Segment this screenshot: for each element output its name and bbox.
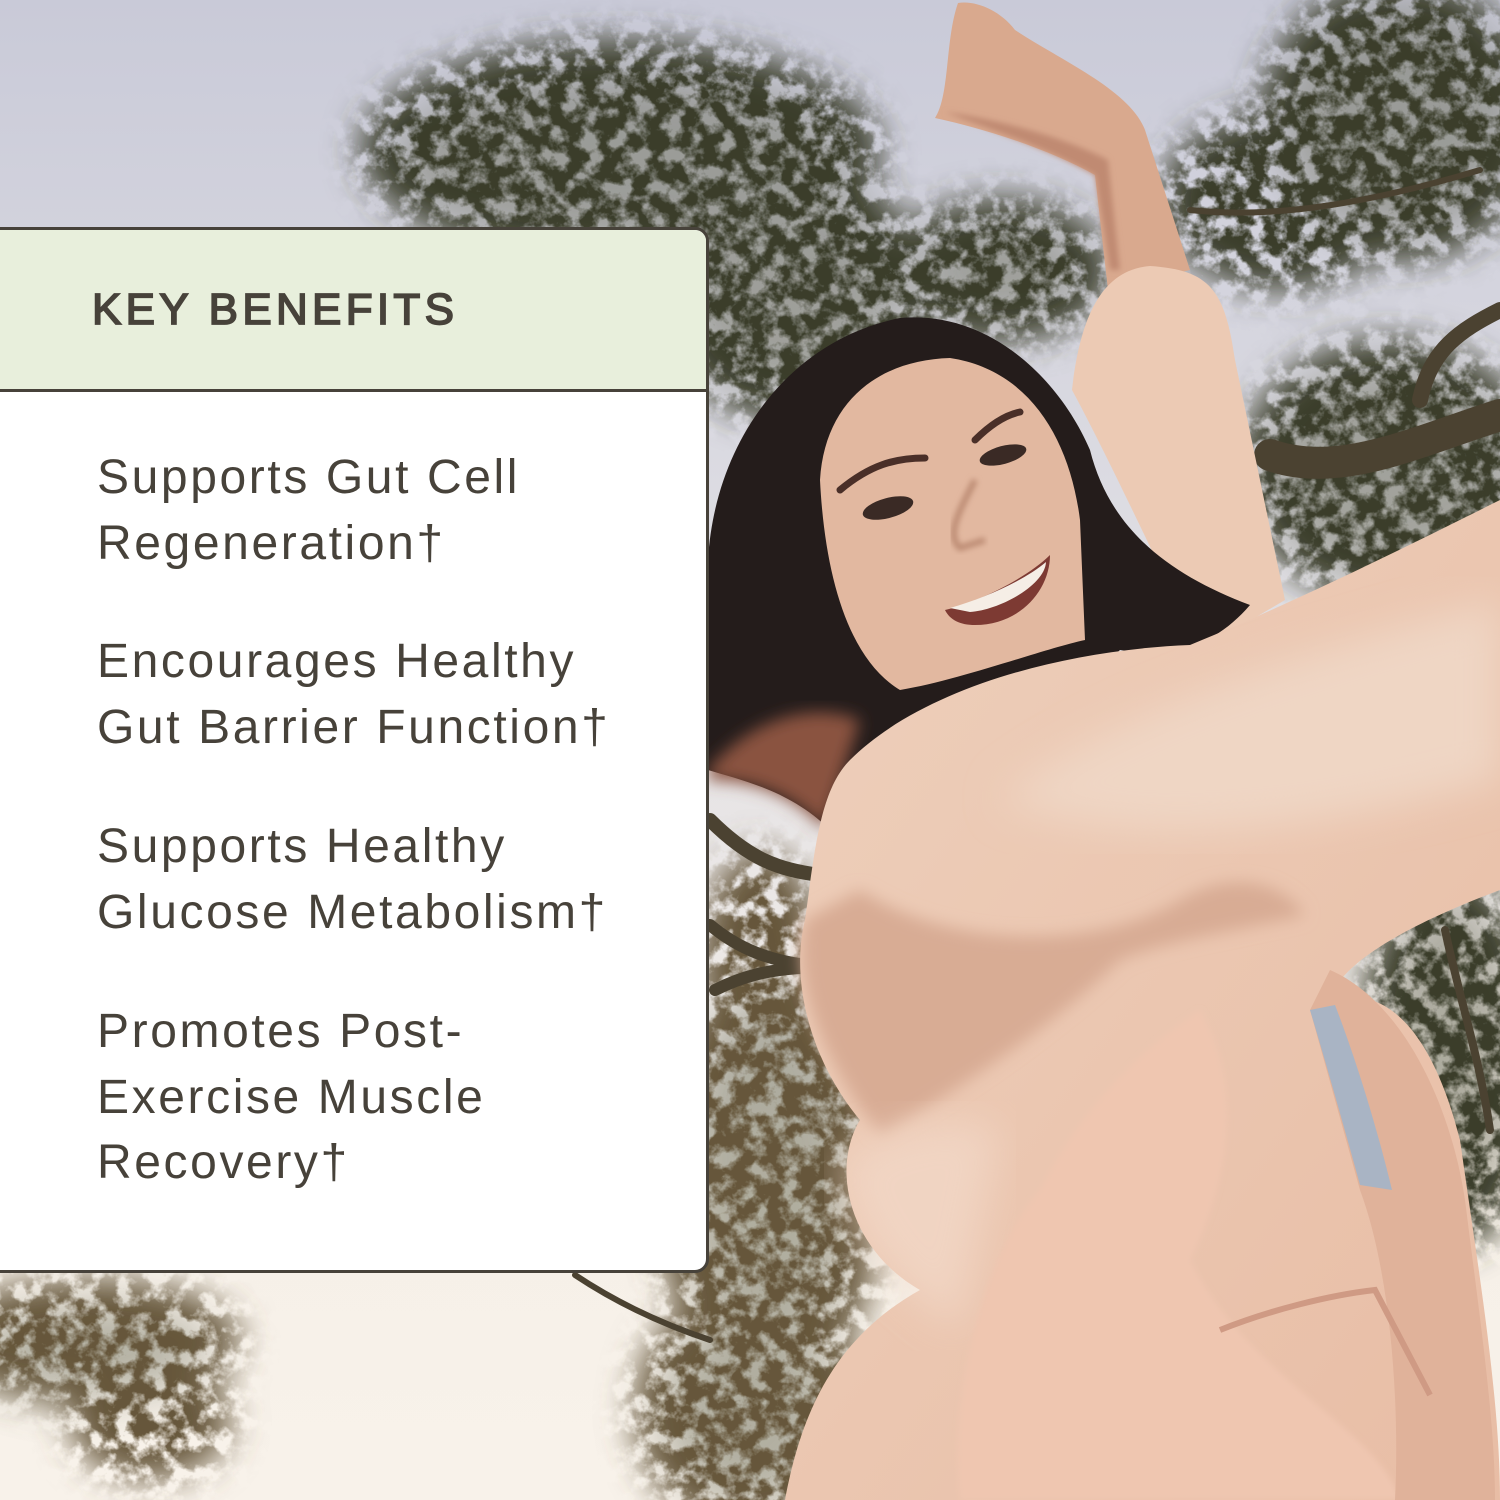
benefit: gut barrier function: Gut Barrier Function† [97,701,610,754]
benefit: gut cell regeneration [97,451,520,570]
card heading band: KEY BENEFITS [92,285,458,334]
benefit: muscle recovery: Recovery† [97,1136,350,1189]
pink fleece jacket [785,500,1500,1500]
benefit: muscle recovery: Exercise Muscle [97,1071,485,1124]
benefit: gut cell regeneration: Supports Gut Cell [97,451,520,504]
card heading band [0,230,706,392]
raised sleeve [1072,266,1285,650]
benefit: gut barrier function: Encourages Healthy [97,635,576,688]
benefit: muscle recovery: Promotes Post- [97,1005,464,1058]
benefit: glucose metabolism: Supports Healthy [97,820,507,873]
face [820,358,1085,690]
key benefits card [0,227,709,1273]
benefit: glucose metabolism [97,820,608,939]
benefit: gut cell regeneration: Regeneration† [97,517,446,570]
woman's raised arm and hand [935,2,1190,290]
benefit: gut barrier function [97,635,610,754]
benefit: glucose metabolism: Glucose Metabolism† [97,886,608,939]
benefit: muscle recovery [97,1005,485,1189]
hair [708,317,1250,830]
